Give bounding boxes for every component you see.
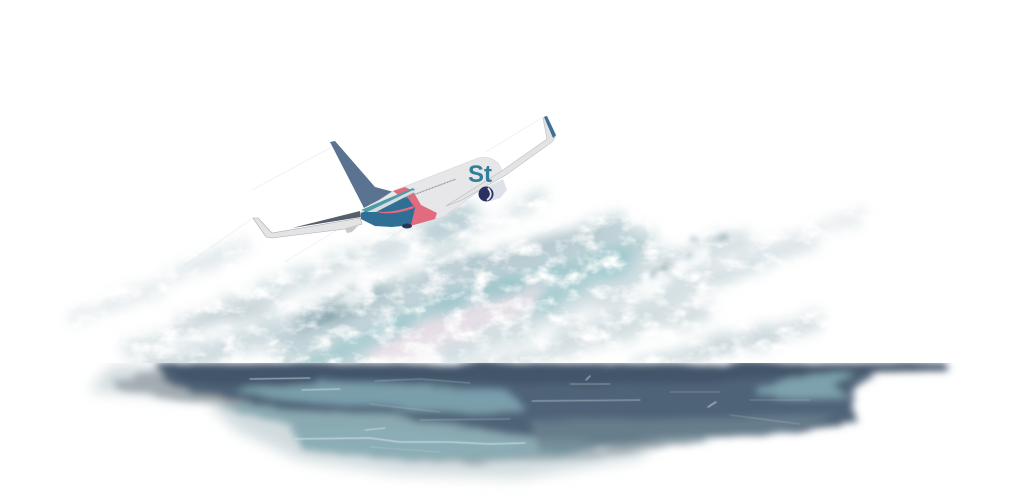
- sea: right teal patch: [755, 372, 860, 398]
- airplane: white dorsal stripe: [367, 190, 415, 212]
- airplane: tail fin: [330, 141, 394, 208]
- airplane: intake highlight: [487, 188, 491, 200]
- airplane: winglet livery: [544, 116, 556, 138]
- airplane: pink tail accent: [374, 206, 414, 213]
- airplane: teal dorsal stripe: [361, 188, 415, 212]
- airplane: pink livery band: [393, 187, 437, 226]
- airplane: horizontal stabilizer: [292, 211, 361, 228]
- sea: grey bottom shadow: [460, 441, 668, 468]
- airplane: flap fairing: [345, 226, 358, 233]
- sea: dark horizon band: [152, 363, 945, 386]
- airplane: engine nacelle: [480, 179, 507, 202]
- sea: pale outer halo: [88, 366, 700, 478]
- cloud dark speckles: [311, 233, 729, 331]
- airplane: engine intake: [478, 186, 494, 202]
- sea: lower teal patch: [288, 426, 298, 436]
- sea: white wave streaks: [250, 376, 810, 452]
- sea: teal base: [220, 398, 598, 466]
- airplane: St logo: St: [468, 161, 492, 188]
- contrail lines: [183, 117, 543, 267]
- airplane: fuselage window line: [405, 179, 456, 198]
- clouds: diagonal wash behind the plane: [75, 196, 860, 372]
- airplane: near wing and winglet: [446, 116, 556, 206]
- airplane: [253, 116, 556, 238]
- airplane: belly fairing: [402, 224, 412, 228]
- sea: dark slate body: [152, 363, 948, 442]
- sea: [88, 363, 948, 478]
- sea: mid grey blend: [530, 412, 840, 452]
- illustration: plane over clouds and sea: [68, 116, 953, 484]
- cloud highlights: [330, 242, 711, 317]
- airplane: blue rear fuselage: [361, 194, 415, 227]
- sea: grey left edge: [110, 372, 260, 408]
- airplane: fuselage: [361, 157, 502, 226]
- sea: light teal patch: [238, 382, 525, 414]
- airplane: far wing and winglet: [253, 218, 362, 238]
